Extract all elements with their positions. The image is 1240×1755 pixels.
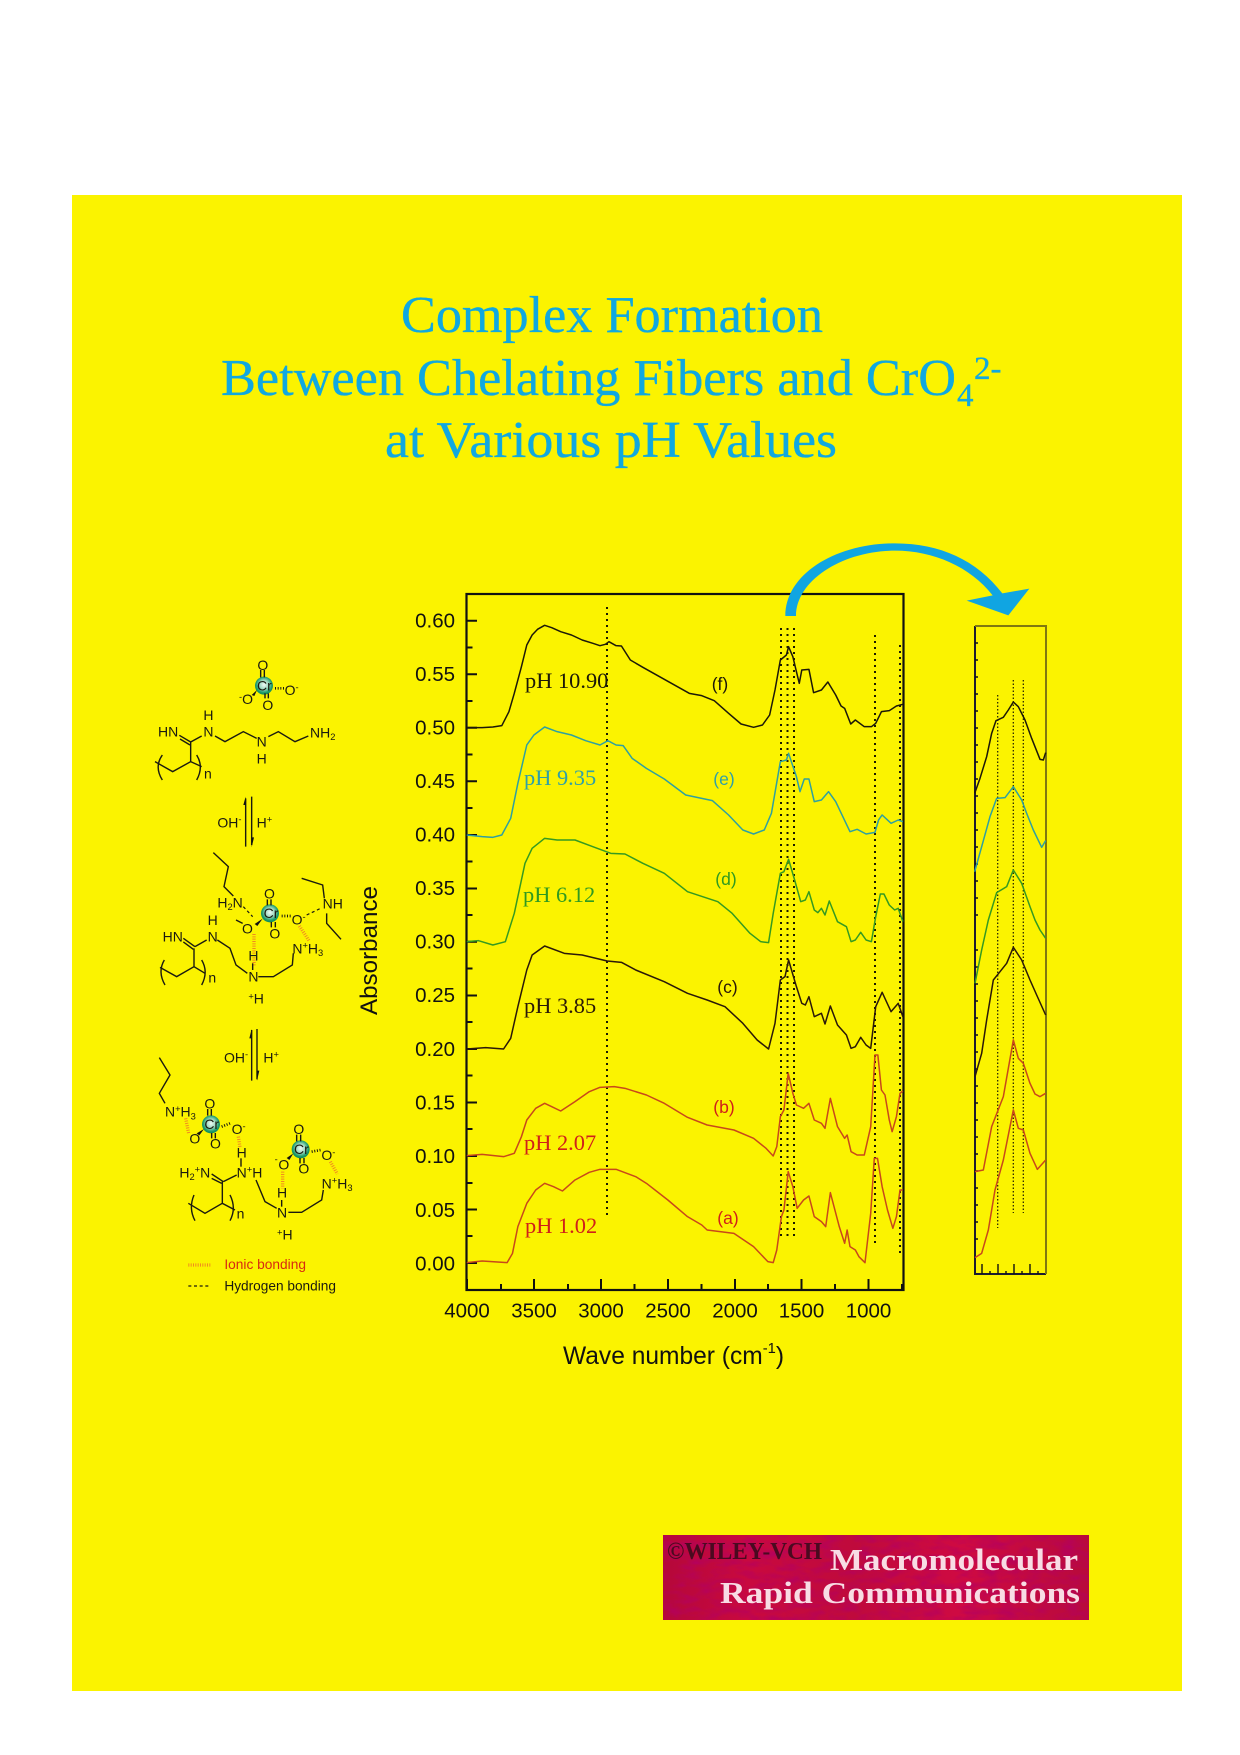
structure 3: complex at low pH: - (332, 1147, 335, 1157)
structure 2: complex at intermediate pH: - (303, 912, 306, 922)
structure 3: complex at low pH: + (332, 1176, 337, 1186)
title: 4 (957, 378, 974, 414)
y axis labels: 0.05 (415, 1199, 455, 1222)
y axis labels: 0.45 (415, 770, 455, 793)
pH labels: pH 1.02 (525, 1213, 597, 1238)
journal logo: Rapid Communications (720, 1575, 1080, 1610)
structure 3: complex at low pH: O (293, 1121, 304, 1137)
equilibrium arrows 2 (224, 1029, 279, 1081)
x axis title: -1 (763, 1340, 776, 1357)
x axis labels: 1000 (846, 1300, 891, 1322)
equilibrium arrows 1: - (238, 815, 241, 825)
structure 3: complex at low pH: N (277, 1205, 287, 1221)
structure 3: complex at low pH: N (322, 1175, 332, 1191)
structure 2: complex at intermediate pH: H (254, 990, 264, 1006)
pH labels (523, 668, 608, 1238)
inset frame (975, 626, 1046, 1274)
structure 3: complex at low pH: - (243, 1121, 246, 1131)
structure 1: chelating fiber with free chromate: O (257, 657, 268, 673)
curve letter labels: (a) (717, 1208, 739, 1228)
title (221, 287, 1002, 469)
FTIR chart (356, 594, 904, 1370)
structure 3: complex at low pH: + (175, 1104, 181, 1114)
structure 1: chelating fiber with free chromate: 2 (330, 732, 335, 742)
x axis title: ) (776, 1342, 784, 1370)
curve letter labels: (b) (713, 1097, 735, 1117)
structure 2: complex at intermediate pH: N (208, 929, 218, 945)
structure 2: complex at intermediate pH: N (292, 940, 302, 956)
structure 3: complex at low pH: 3 (191, 1111, 196, 1121)
structure 3: complex at low pH: N (165, 1104, 175, 1120)
arrow: chart to inset (785, 543, 1029, 616)
curve f (467, 625, 903, 728)
legend: bonding types: Ionic bonding (224, 1257, 306, 1272)
structure 3: complex at low pH: - (275, 1155, 278, 1165)
structure 2: complex at intermediate pH: NH (323, 895, 343, 911)
equilibrium arrows 2: + (273, 1050, 279, 1060)
inset curve f (975, 702, 1046, 793)
structure 3: complex at low pH: O (278, 1156, 289, 1172)
equilibrium arrows 2: OH (224, 1049, 245, 1065)
y axis labels: 0.15 (415, 1092, 455, 1114)
structure 1: chelating fiber with free chromate: N (257, 734, 267, 750)
x axis title: Wave number (cm (563, 1342, 766, 1370)
structure 1: chelating fiber with free chromate: O (242, 691, 253, 707)
structure 2: complex at intermediate pH: O (292, 912, 303, 928)
equilibrium arrows 1 (217, 797, 272, 847)
inset curve e (975, 787, 1046, 872)
title: at Various pH Values (385, 412, 837, 469)
x axis labels: 2500 (645, 1300, 691, 1322)
inset curve c (975, 947, 1046, 1077)
structure 1: chelating fiber with free chromate: - (296, 682, 299, 692)
inset ticks (975, 643, 1038, 1274)
curve letter labels: (c) (717, 977, 738, 997)
structure 2: complex at intermediate pH (160, 853, 343, 1006)
structure 3: complex at low pH: O (232, 1121, 243, 1137)
inset curve d (975, 870, 1046, 983)
structure 2: complex at intermediate pH: n (208, 969, 216, 985)
structure 3: complex at low pH: H (337, 1175, 347, 1191)
y axis labels: 0.35 (415, 877, 455, 900)
structure 1: chelating fiber with free chromate: O (262, 697, 273, 713)
structure 3: complex at low pH: 2 (189, 1172, 195, 1182)
structure 3: complex at low pH: H (277, 1184, 287, 1200)
structure 1: chelating fiber with free chromate: n (204, 765, 212, 781)
structure 3: complex at low pH: H (237, 1144, 247, 1160)
legend: bonding types (188, 1257, 336, 1294)
curve letter labels: (e) (713, 769, 735, 789)
structure 1: chelating fiber with free chromate: N (203, 724, 213, 740)
structure 3: complex at low pH: O (189, 1130, 200, 1146)
spectra lower group (467, 946, 903, 1263)
structure 1: chelating fiber with free chromate: H (257, 750, 267, 766)
pH labels: pH 10.90 (525, 668, 608, 693)
structure 3: complex at low pH: Cr (294, 1141, 309, 1157)
equilibrium arrows 2: - (245, 1050, 248, 1060)
structure 3: complex at low pH: H (282, 1226, 293, 1242)
structure 3: complex at low pH: H (181, 1104, 191, 1120)
x axis labels: 2000 (712, 1300, 758, 1322)
structure 2: complex at intermediate pH: HN (163, 929, 183, 945)
journal logo (663, 1535, 1089, 1620)
structure 1: chelating fiber with free chromate: - (239, 692, 242, 702)
curve c (467, 946, 903, 1049)
pH labels: pH 3.85 (524, 993, 596, 1018)
inset curve a (975, 1110, 1046, 1258)
structure 2: complex at intermediate pH: + (302, 941, 308, 951)
spectra upper group (467, 625, 903, 945)
y axis labels: 0.60 (415, 610, 455, 632)
structure 2: complex at intermediate pH: 3 (318, 948, 323, 958)
x axis labels: 3000 (578, 1300, 624, 1322)
structure 2: complex at intermediate pH: O (242, 920, 253, 936)
y axis labels (415, 610, 455, 1276)
y axis labels: 0.40 (415, 824, 455, 846)
yellow poster panel (72, 195, 1182, 1691)
equilibrium arrows 1: H (257, 814, 267, 830)
structure 2: complex at intermediate pH: N (248, 969, 258, 985)
equilibrium arrows 1: OH (217, 814, 238, 830)
x axis labels (444, 1300, 891, 1322)
structure 2: complex at intermediate pH: H (248, 948, 258, 964)
structure 2: complex at intermediate pH: H (308, 940, 318, 956)
x axis labels: 1500 (779, 1300, 824, 1322)
pH labels: pH 2.07 (524, 1130, 596, 1155)
reference dotted lines (607, 607, 900, 1257)
y axis labels: 0.25 (415, 984, 455, 1007)
structure 3: complex at low pH: 3 (347, 1183, 353, 1193)
structure 3: complex at low pH (159, 1058, 353, 1242)
curve a (467, 1158, 903, 1263)
curve b (467, 1055, 903, 1157)
curve d (467, 838, 903, 945)
structure 2: complex at intermediate pH: 2 (227, 902, 233, 912)
structure 3: complex at low pH: O (321, 1147, 332, 1163)
structure 2: complex at intermediate pH: O (264, 886, 275, 902)
structure 2: complex at intermediate pH: N (233, 894, 243, 910)
structure 3: complex at low pH: + (195, 1165, 200, 1175)
y axis labels: 0.50 (415, 716, 455, 740)
inset curve b (975, 1040, 1046, 1172)
structure 3: complex at low pH: O (204, 1095, 215, 1111)
structure 3: complex at low pH: n (237, 1205, 244, 1221)
structure 1: chelating fiber with free chromate: Cr (257, 677, 272, 693)
structure 3: complex at low pH: + (247, 1165, 252, 1175)
curve e (467, 727, 903, 837)
structure 3: complex at low pH: H (252, 1164, 262, 1180)
y axis labels: 0.10 (415, 1145, 455, 1168)
structure 1: chelating fiber with free chromate: NH (310, 724, 330, 740)
y axis labels: 0.55 (415, 663, 455, 686)
structure 3: complex at low pH: N (237, 1164, 247, 1180)
structure 2: complex at intermediate pH: H (217, 894, 227, 910)
pH labels: pH 6.12 (523, 882, 595, 907)
structure 1: chelating fiber with free chromate (155, 657, 335, 781)
curve letter labels (712, 674, 739, 1228)
structure 2: complex at intermediate pH: Cr (264, 905, 279, 921)
pH labels: pH 9.35 (524, 765, 596, 790)
structure 3: complex at low pH: + (277, 1227, 282, 1237)
structure 1: chelating fiber with free chromate: H (203, 707, 213, 723)
structure 3: complex at low pH: O (298, 1160, 309, 1176)
y axis title: Absorbance (356, 886, 383, 1015)
curve letter labels: (f) (712, 674, 728, 694)
structure 2: complex at intermediate pH: O (269, 926, 280, 942)
y axis labels: 0.20 (415, 1038, 455, 1061)
title: Complex Formation (401, 287, 823, 344)
structure 1: chelating fiber with free chromate: HN (158, 724, 178, 740)
y axis labels: 0.00 (415, 1252, 455, 1276)
legend: bonding types: Hydrogen bonding (224, 1279, 336, 1294)
inset chart: zoomed spectra (975, 626, 1046, 1274)
x axis labels: 4000 (444, 1300, 490, 1322)
chemical structures panel (155, 657, 353, 1294)
structure 1: chelating fiber with free chromate: O (285, 682, 296, 698)
inset reference dotted lines (998, 680, 1023, 1228)
y axis labels: 0.30 (415, 930, 455, 954)
title: 2- (974, 351, 1002, 387)
x axis labels: 3500 (511, 1300, 557, 1322)
journal logo: ©WILEY-VCH (667, 1539, 822, 1565)
structure 3: complex at low pH: Cr (204, 1116, 219, 1132)
structure 3: complex at low pH: H (179, 1164, 189, 1180)
plot frame (466, 594, 904, 1290)
structure 3: complex at low pH: O (210, 1135, 221, 1151)
structure 2: complex at intermediate pH: + (248, 991, 254, 1001)
axis ticks (467, 621, 902, 1290)
journal logo: Macromolecular (830, 1542, 1078, 1577)
title: Between Chelating Fibers and CrO (221, 350, 956, 407)
structure 3: complex at low pH: N (200, 1164, 210, 1180)
equilibrium arrows 2: H (263, 1049, 273, 1065)
structure 2: complex at intermediate pH: H (208, 912, 218, 928)
curve letter labels: (d) (715, 869, 737, 889)
equilibrium arrows 1: + (267, 815, 272, 825)
